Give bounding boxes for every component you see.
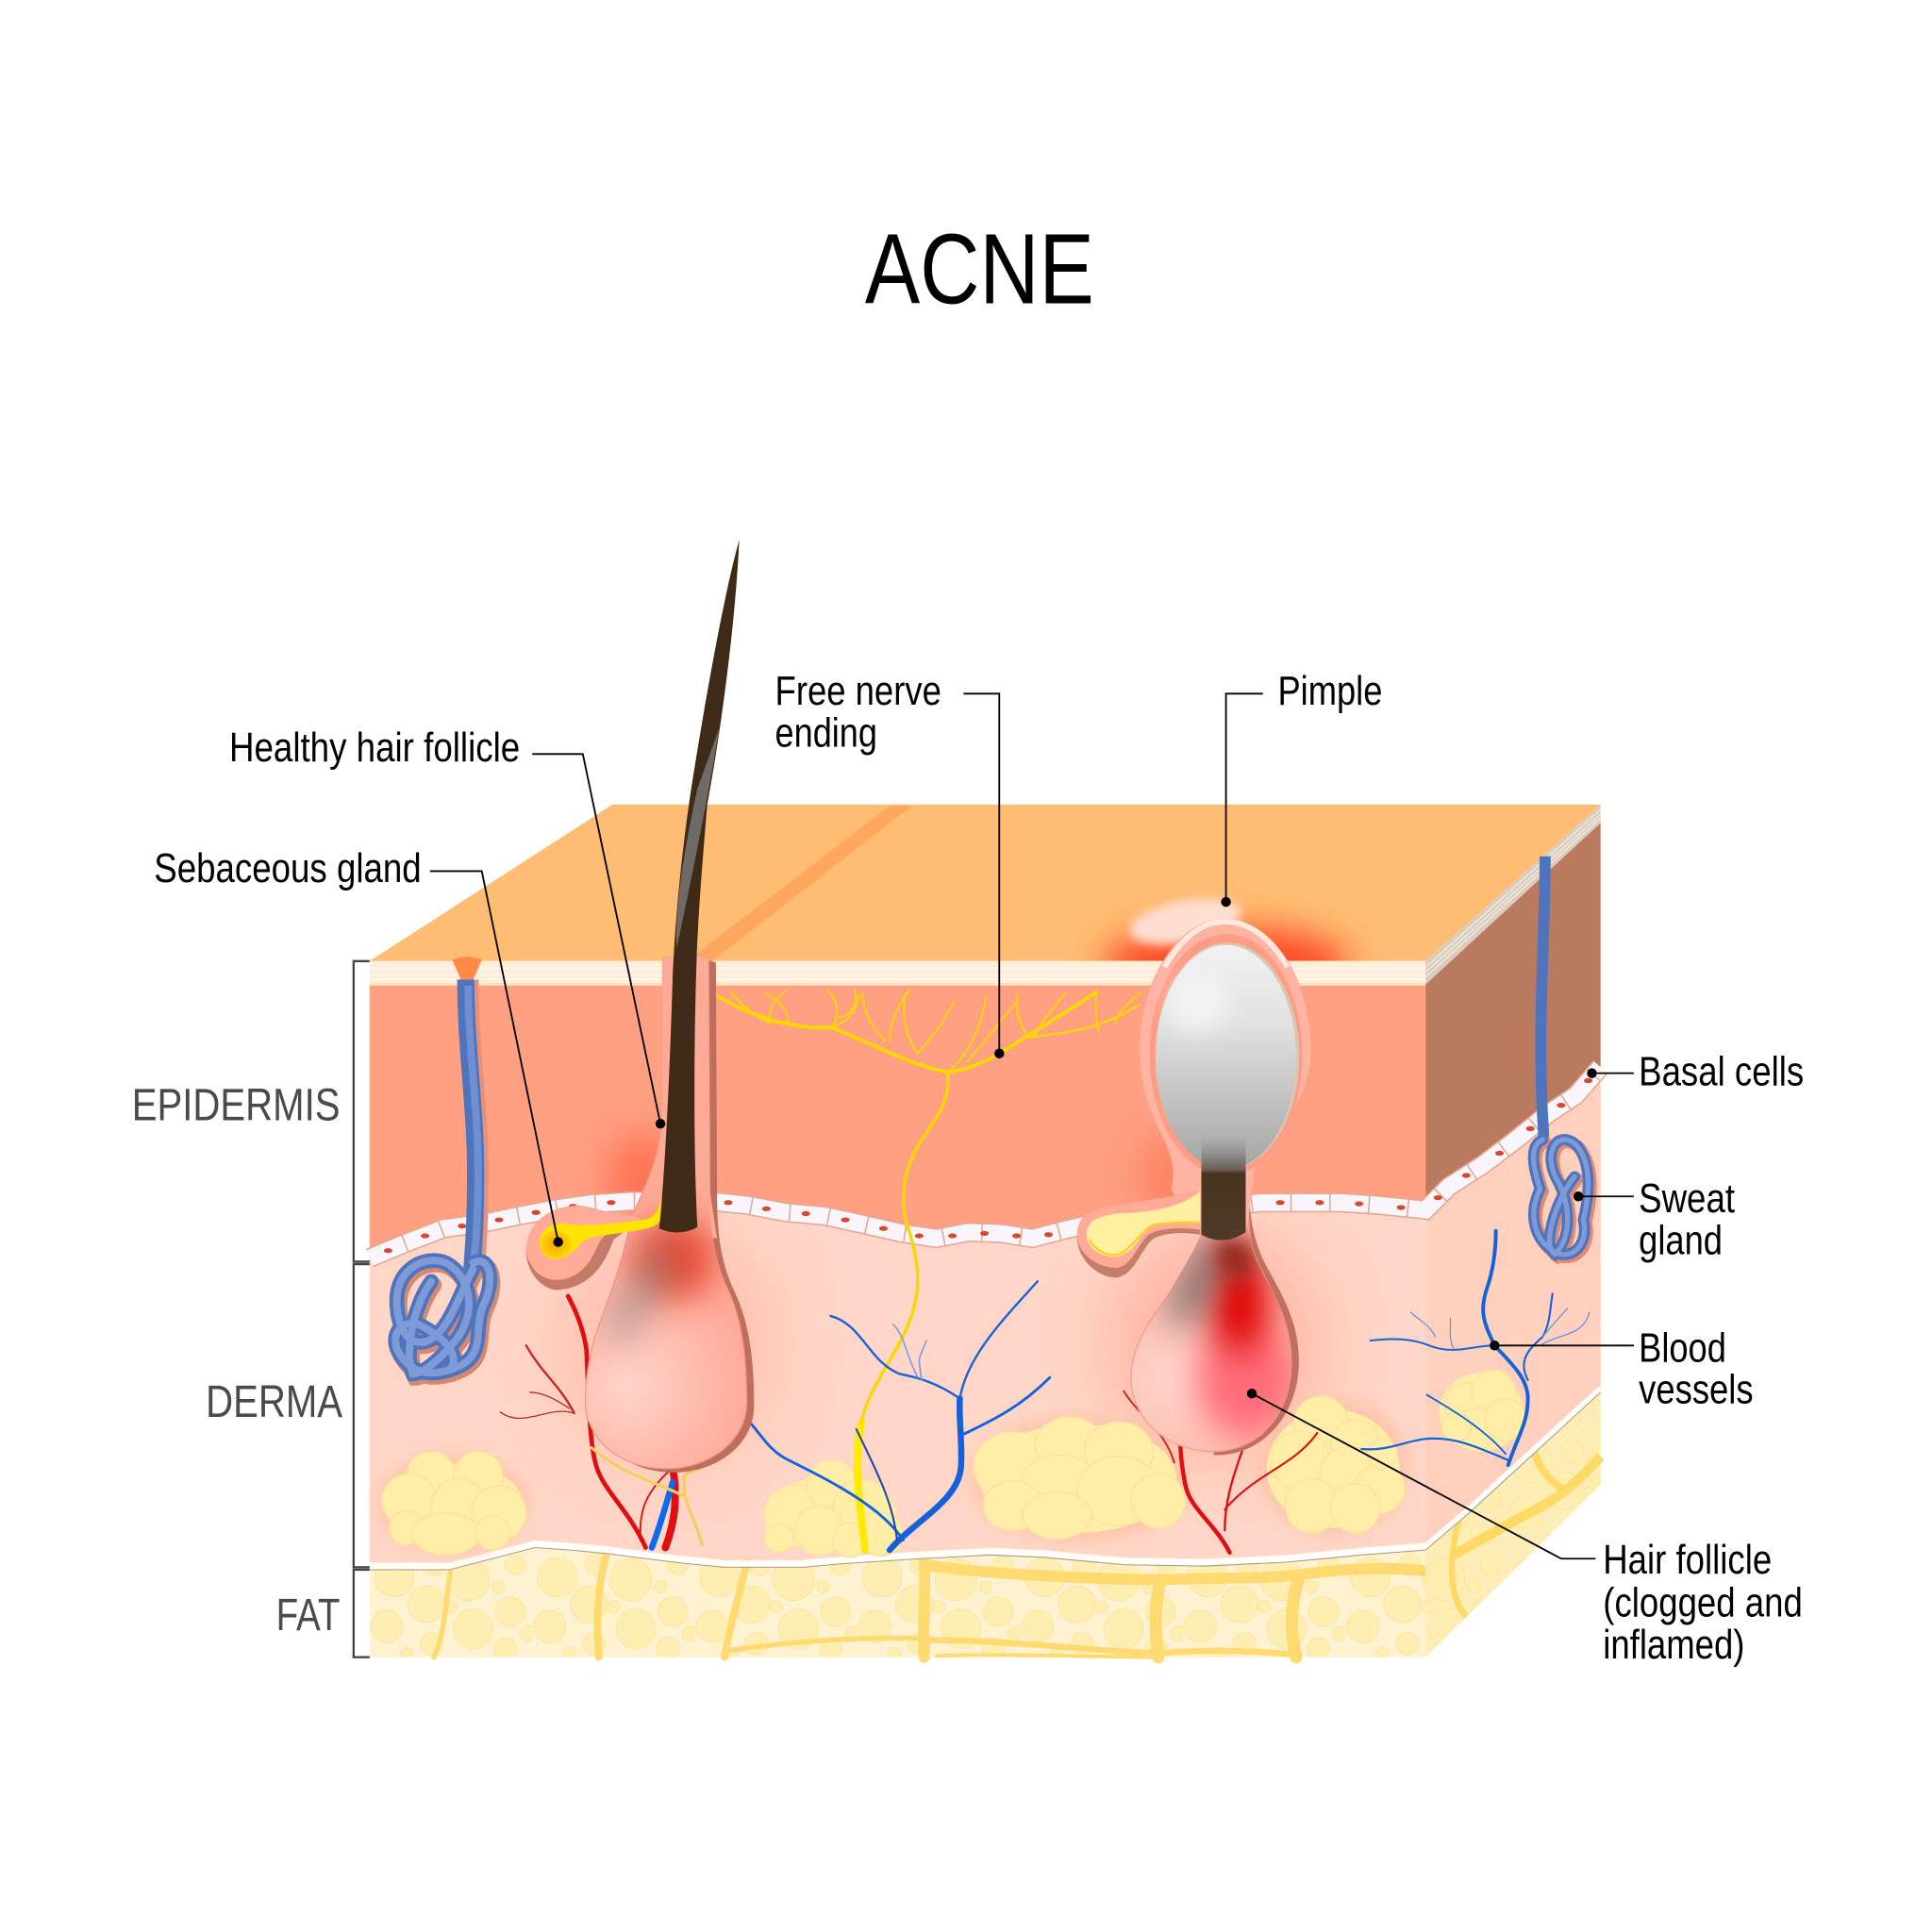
sweat gland right — [1534, 857, 1591, 1257]
callout sweat gland — [1574, 1176, 1735, 1264]
callout sweat gland: gland — [1639, 1219, 1723, 1264]
fat layer side — [1425, 1385, 1601, 1657]
sebaceous gland inflamed — [1077, 1191, 1200, 1277]
dermis side — [1425, 1067, 1601, 1545]
pimple bump on surface — [1085, 892, 1368, 961]
pore — [452, 957, 482, 979]
follicle shadow — [592, 958, 754, 1473]
coil — [1534, 1140, 1591, 1257]
sweat gland left — [395, 957, 492, 1377]
callout blood vessels: Blood — [1639, 1325, 1726, 1371]
label derma: DERMA — [206, 1376, 343, 1427]
blood vessels blue side — [1361, 1231, 1590, 1465]
upper highlight rim — [1164, 922, 1288, 967]
fat lobule D — [1259, 1396, 1407, 1533]
fat lobule C — [973, 1417, 1185, 1541]
callout basal cells: Basal cells — [1639, 1050, 1804, 1095]
inflamed pink — [1198, 1324, 1296, 1437]
skin block — [370, 805, 1601, 1657]
pus rim — [1155, 942, 1299, 1170]
dermis front — [370, 1183, 1425, 1565]
hair stump — [1201, 1136, 1245, 1241]
fat lobule B — [764, 1460, 903, 1557]
epidermis front — [370, 986, 1425, 1258]
callout blood vessels — [1490, 1325, 1754, 1413]
bracket epidermis — [354, 961, 370, 1261]
fat lobule A — [379, 1452, 527, 1555]
blood vessels red left — [500, 1296, 702, 1547]
epidermis inflammation glow — [607, 1131, 1205, 1235]
hair — [659, 540, 740, 1232]
bulb inflammation — [636, 1220, 715, 1299]
free nerve ending — [712, 990, 1140, 1550]
callout basal cells — [1587, 1050, 1804, 1095]
healthy hair follicle — [526, 540, 754, 1473]
sebum — [1087, 1191, 1200, 1257]
blood vessels blue — [752, 1281, 1050, 1550]
follicle body — [1131, 919, 1311, 1452]
callout sebaceous gland — [154, 846, 563, 1247]
bracket fat — [354, 1570, 370, 1657]
callout pimple: Pimple — [1277, 669, 1382, 714]
callout clogged hair follicle: (clogged and — [1603, 1581, 1803, 1626]
label fat: FAT — [276, 1590, 340, 1641]
sebaceous gland healthy — [526, 1199, 664, 1291]
stratum corneum strip — [370, 961, 1425, 986]
epidermis side — [1425, 823, 1601, 1210]
callout free nerve ending — [775, 669, 1004, 1058]
callout clogged hair follicle — [1247, 1389, 1803, 1668]
coil — [395, 1260, 492, 1377]
callout clogged hair follicle: inflamed) — [1603, 1623, 1744, 1668]
skin crease — [695, 806, 912, 961]
sheath inner ring — [1150, 934, 1303, 1175]
membrane outline — [370, 1392, 1601, 1570]
blood vessels red right — [1124, 1391, 1317, 1553]
bracket derma — [354, 1264, 370, 1567]
follicle body — [585, 955, 747, 1469]
callout blood vessels: vessels — [1639, 1368, 1754, 1413]
side corneum — [1425, 805, 1601, 985]
fat lobule E — [1440, 1370, 1526, 1452]
callout healthy hair follicle — [229, 725, 665, 1128]
pimple clogged follicle — [1077, 919, 1311, 1456]
title: ACNE — [865, 213, 1094, 325]
follicle dermis glow — [559, 1220, 1322, 1466]
label epidermis: EPIDERMIS — [132, 1079, 340, 1130]
callout free nerve ending: ending — [775, 711, 877, 757]
callout free nerve ending: Free nerve — [775, 669, 941, 714]
pus highlight — [1168, 974, 1227, 1034]
duct — [470, 979, 479, 1269]
bulb gray shade — [604, 1239, 675, 1345]
follicle shadow — [1214, 1171, 1299, 1456]
sebum — [540, 1199, 664, 1259]
follicle upper sheath — [1140, 919, 1311, 1235]
basal cell layer — [370, 1067, 1601, 1258]
dermis-fat membrane — [370, 1389, 1601, 1566]
callout sweat gland: Sweat — [1639, 1176, 1735, 1222]
callout pimple — [1221, 669, 1382, 907]
sebum core — [540, 1231, 572, 1258]
callout sebaceous gland: Sebaceous gland — [154, 846, 422, 891]
neck shade — [1164, 1235, 1230, 1331]
hair highlight — [676, 727, 720, 949]
callout clogged hair follicle: Hair follicle — [1603, 1538, 1772, 1583]
follicle neck sheath — [635, 955, 717, 1239]
duct — [1541, 857, 1545, 1146]
fat layer front — [370, 1541, 1425, 1657]
pus — [1156, 945, 1296, 1170]
callout healthy hair follicle: Healthy hair follicle — [229, 725, 520, 771]
inflamed red — [1210, 1255, 1269, 1353]
top face of skin — [370, 805, 1601, 961]
